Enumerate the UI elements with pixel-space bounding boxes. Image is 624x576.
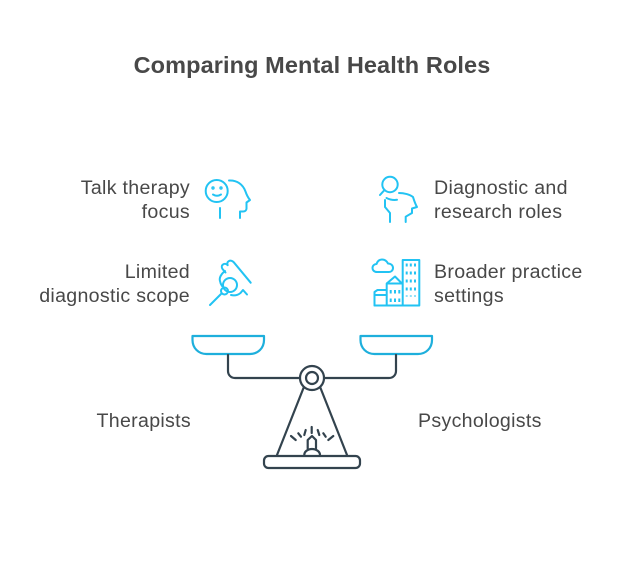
right scale pan <box>360 336 432 354</box>
text: broader practice settings <box>434 261 583 307</box>
text: talk therapy focus: Talk therapy <box>81 177 190 199</box>
text: therapists: Therapists <box>97 410 191 432</box>
text: diagnostic and research roles: research roles <box>434 201 562 223</box>
text: diagnostic and research roles <box>434 177 568 223</box>
text: talk therapy focus <box>81 177 190 223</box>
text: broader practice settings: Broader practice <box>434 261 583 283</box>
text: limited diagnostic scope: diagnostic scope <box>39 285 190 307</box>
title: Comparing Mental Health Roles <box>134 52 490 78</box>
text: talk therapy focus: focus <box>142 201 190 223</box>
left scale pan <box>192 336 264 354</box>
icon: smiling face and head <box>206 180 250 218</box>
text: diagnostic and research roles: Diagnostic and <box>434 177 568 199</box>
icon: hand with magnifying circle <box>210 261 251 305</box>
balance scale stand <box>228 355 396 468</box>
text: limited diagnostic scope: Limited <box>125 261 190 283</box>
text: broader practice settings: settings <box>434 285 504 307</box>
text: psychologists: Psychologists <box>418 410 542 432</box>
text: limited diagnostic scope <box>39 261 190 307</box>
icon: city buildings and cloud <box>372 260 419 306</box>
icon: magnifier and head <box>380 177 417 222</box>
